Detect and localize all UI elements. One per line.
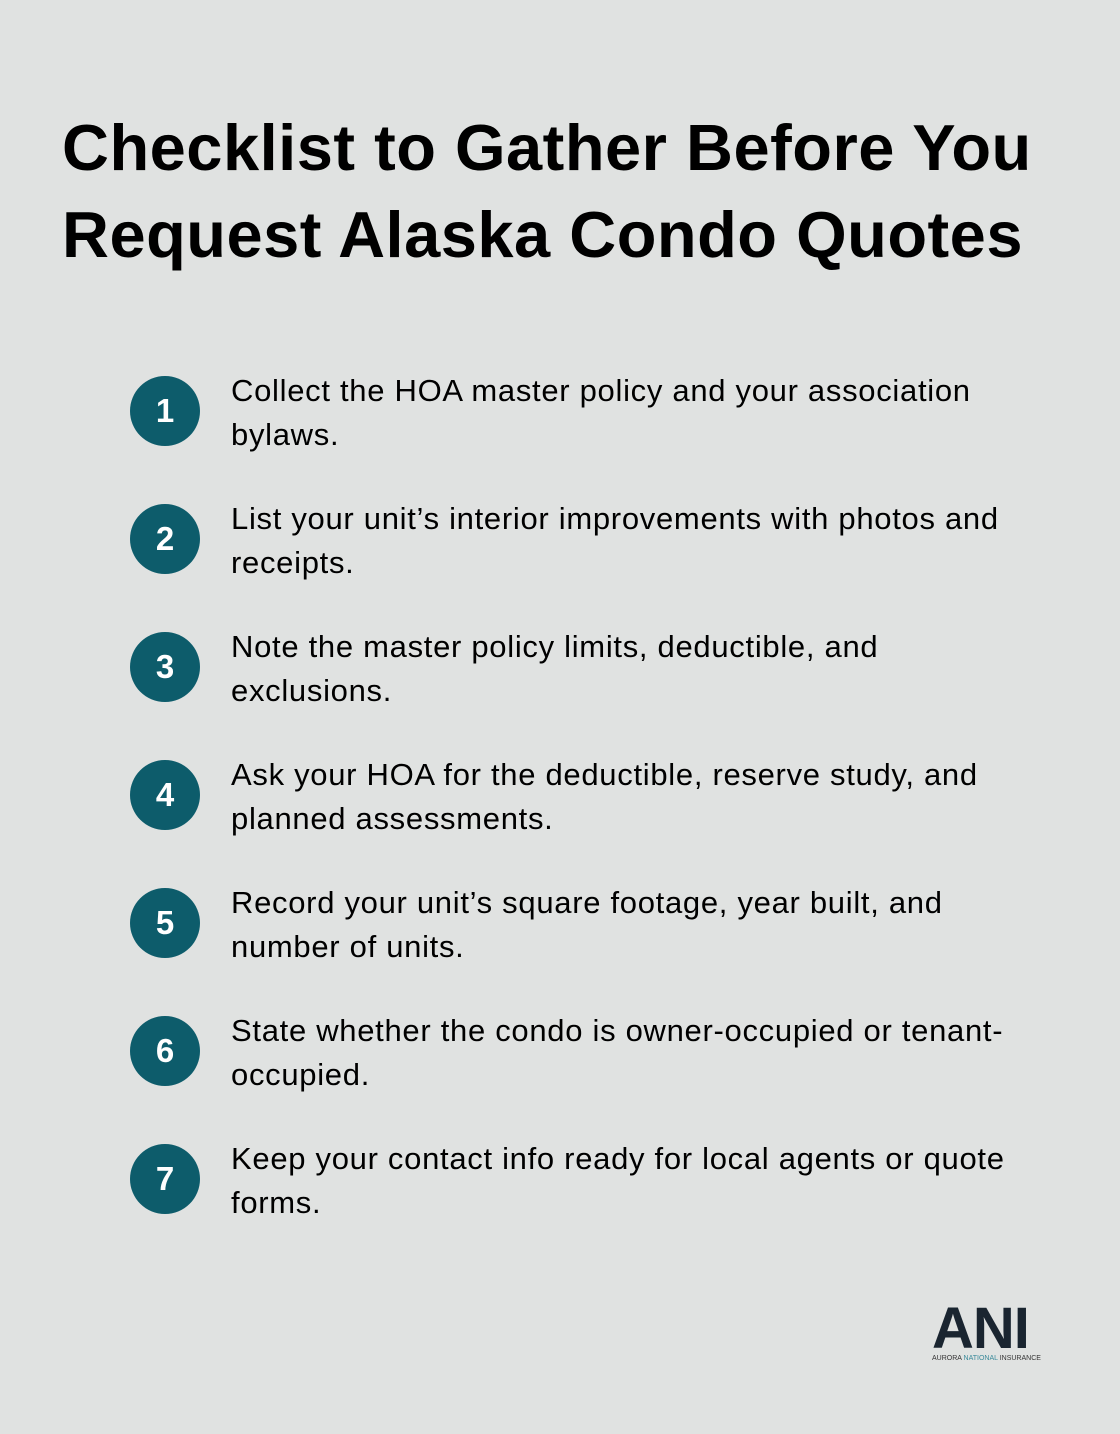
item 2: 2 <box>156 520 174 557</box>
item 6: State whether the condo is owner-occupied or tenant- <box>231 1013 1003 1048</box>
item 6 <box>130 1013 1003 1092</box>
logo: AURORA NATIONAL INSURANCE <box>932 1355 1041 1362</box>
item 4 <box>130 757 978 836</box>
item 2 <box>130 501 999 580</box>
item 5: number of units. <box>231 929 464 964</box>
item 4: Ask your HOA for the deductible, reserve study, and <box>231 757 978 792</box>
item 6: 6 <box>156 1032 174 1069</box>
item 3: exclusions. <box>231 673 392 708</box>
item 3: 3 <box>156 648 174 685</box>
item 1 <box>130 373 971 452</box>
item 4: 4 <box>156 776 174 813</box>
item 2: List your unit’s interior improvements with photos and <box>231 501 999 536</box>
item 3: Note the master policy limits, deductible, and <box>231 629 878 664</box>
item 6: occupied. <box>231 1057 370 1092</box>
item 2: receipts. <box>231 545 354 580</box>
item 4: planned assessments. <box>231 801 553 836</box>
item 1: bylaws. <box>231 417 339 452</box>
title: Checklist to Gather Before You <box>62 111 1032 184</box>
item 3 <box>130 629 878 708</box>
item 7: forms. <box>231 1185 321 1220</box>
item 7 <box>130 1141 1005 1220</box>
item 1: Collect the HOA master policy and your association <box>231 373 971 408</box>
title: Request Alaska Condo Quotes <box>62 198 1023 271</box>
item 5 <box>130 885 943 964</box>
title <box>62 111 1032 271</box>
item 5: Record your unit’s square footage, year built, and <box>231 885 943 920</box>
logo: ANI <box>932 1296 1029 1361</box>
item 7: Keep your contact info ready for local agents or quote <box>231 1141 1005 1176</box>
item 1: 1 <box>156 392 174 429</box>
item 7: 7 <box>156 1160 174 1197</box>
item 5: 5 <box>156 904 174 941</box>
